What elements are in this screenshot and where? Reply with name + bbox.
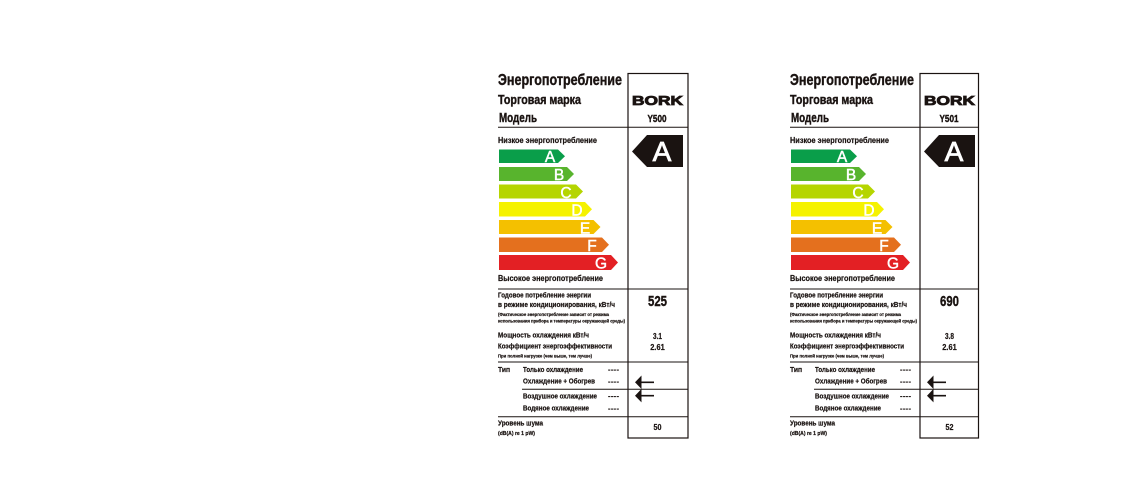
noise level text: Уровень шума <box>498 419 544 428</box>
rating badge A <box>632 135 683 167</box>
annual consumption text: Годовое потребление энергии <box>790 290 883 300</box>
scale top caption: Низкое энергопотребление <box>790 135 889 145</box>
energy class scale <box>499 149 618 272</box>
brand logo: BORK <box>924 94 975 108</box>
scale bottom caption: Высокое энергопотребление <box>790 273 895 283</box>
annual consumption text <box>790 290 917 324</box>
type list <box>790 365 912 413</box>
cooling specs values <box>942 331 957 352</box>
energy class scale: E <box>872 220 882 238</box>
rating badge A <box>924 135 975 167</box>
cooling specs text: Коэффициент энергоэффективности <box>498 342 612 351</box>
heading: Торговая марка <box>498 93 582 107</box>
energy class scale: D <box>571 202 583 220</box>
cooling specs text <box>790 331 904 359</box>
type list <box>498 365 620 413</box>
noise level text: (dB(A) re 1 pW) <box>790 431 827 437</box>
heading <box>790 72 914 125</box>
type list: Воздушное охлаждение <box>523 392 597 400</box>
annual consumption value: 525 <box>648 294 667 310</box>
model name: Y501 <box>940 113 959 125</box>
model name: Y500 <box>648 113 667 125</box>
arrow: cooling and heating <box>927 376 946 389</box>
cooling specs text: Коэффициент энергоэффективности <box>790 342 904 351</box>
heading: Модель <box>791 111 829 125</box>
type list: ---- <box>608 404 620 413</box>
annual consumption text: (Фактическое энергопотребление зависит от режима <box>790 311 901 317</box>
heading: Модель <box>499 111 537 125</box>
heading: Энергопотребление <box>498 72 622 89</box>
energy class scale: B <box>846 167 856 184</box>
type list: ---- <box>900 365 912 374</box>
energy class scale: C <box>852 185 864 202</box>
energy class scale: G <box>887 256 899 272</box>
type list: Водяное охлаждение <box>815 404 881 413</box>
cooling specs values <box>650 331 665 352</box>
annual consumption text: использования прибора и температуры окружающей среды) <box>498 318 625 324</box>
arrow: air cooling <box>927 389 946 402</box>
type list: Охлаждение + Обогрев <box>523 376 595 386</box>
noise level text: Уровень шума <box>790 419 836 428</box>
type list: Только охлаждение <box>815 365 875 374</box>
heading <box>498 72 622 125</box>
annual consumption text: Годовое потребление энергии <box>498 290 591 300</box>
annual consumption text <box>498 290 625 324</box>
energy class scale: G <box>595 256 607 272</box>
energy class scale: D <box>863 202 875 220</box>
type list: ---- <box>608 392 620 400</box>
noise level text: (dB(A) re 1 pW) <box>498 431 535 437</box>
cooling specs values: 2.61 <box>650 342 665 352</box>
noise level text <box>790 419 836 437</box>
rating badge A: A <box>653 136 672 167</box>
cooling specs values: 3.8 <box>945 331 954 341</box>
scale top caption: Низкое энергопотребление <box>498 135 597 145</box>
cooling specs text: При полной нагрузке (чем выше, тем лучше) <box>498 353 592 359</box>
energy class scale: C <box>560 185 572 202</box>
type list: ---- <box>900 377 912 386</box>
heading: Энергопотребление <box>790 72 914 89</box>
energy class scale: B <box>554 167 564 184</box>
type list: Водяное охлаждение <box>523 404 589 413</box>
panel: energy label Y500 <box>498 72 688 438</box>
type list: ---- <box>900 392 912 400</box>
annual consumption text: использования прибора и температуры окружающей среды) <box>790 318 917 324</box>
noise level text <box>498 419 544 437</box>
energy class scale: F <box>587 238 597 255</box>
type list: Охлаждение + Обогрев <box>815 376 887 386</box>
cooling specs text: Мощность охлаждения кВт/ч <box>498 331 589 340</box>
cooling specs text <box>498 331 612 359</box>
annual consumption value: 690 <box>940 294 959 310</box>
brand logo: BORK <box>632 94 683 108</box>
cooling specs values: 3.1 <box>653 331 662 341</box>
cooling specs text: При полной нагрузке (чем выше, тем лучше) <box>790 353 884 359</box>
cooling specs values: 2.61 <box>942 342 957 352</box>
energy class scale <box>791 149 910 272</box>
heading: Торговая марка <box>790 93 874 107</box>
type list: Только охлаждение <box>523 365 583 374</box>
noise level value: 52 <box>946 422 954 432</box>
energy class scale: A <box>837 149 848 166</box>
annual consumption text: в режиме кондиционирования, кВт/ч <box>498 300 615 309</box>
noise level value: 50 <box>654 422 662 432</box>
arrow: air cooling <box>635 389 654 402</box>
type list: Тип <box>498 365 510 374</box>
rating badge A: A <box>945 136 964 167</box>
type list: ---- <box>608 365 620 374</box>
type list: Тип <box>790 365 802 374</box>
type list: ---- <box>900 404 912 413</box>
cooling specs text: Мощность охлаждения кВт/ч <box>790 331 881 340</box>
annual consumption text: в режиме кондиционирования, кВт/ч <box>790 300 907 309</box>
type list: Воздушное охлаждение <box>815 392 889 400</box>
arrow: cooling and heating <box>635 376 654 389</box>
energy class scale: E <box>580 220 590 238</box>
energy class scale: F <box>879 238 889 255</box>
panel: energy label Y501 <box>790 72 979 438</box>
type list: ---- <box>608 377 620 386</box>
annual consumption text: (Фактическое энергопотребление зависит от режима <box>498 311 609 317</box>
scale bottom caption: Высокое энергопотребление <box>498 273 603 283</box>
energy class scale: A <box>545 149 556 166</box>
